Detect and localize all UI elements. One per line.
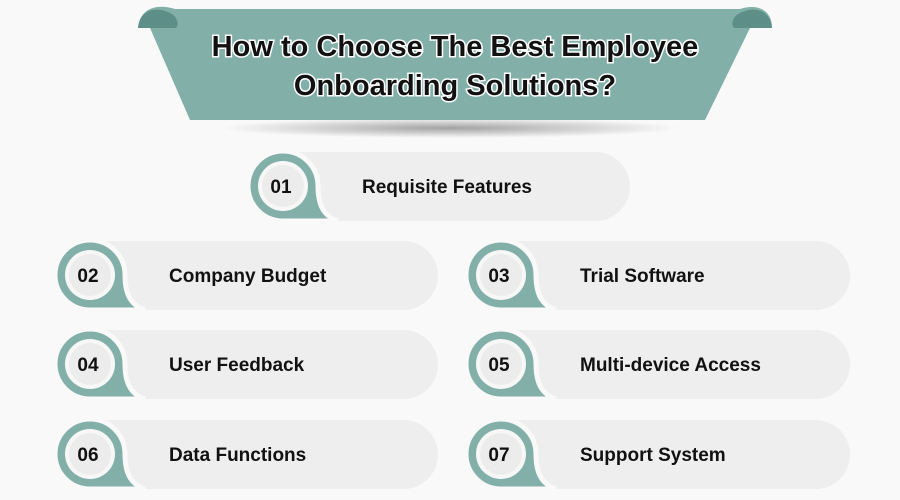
item 06 (55, 419, 438, 489)
item 07 (466, 419, 850, 489)
title banner: How to Choose The Best Employee (212, 31, 698, 63)
item 05 (466, 329, 850, 399)
item 02: Company Budget (169, 266, 327, 287)
item 01 (247, 151, 630, 221)
item 05: Multi-device Access (580, 355, 761, 376)
item 04: User Feedback (169, 355, 305, 376)
title banner (138, 7, 772, 138)
item 05: 05 (488, 355, 510, 376)
item 03: 03 (488, 266, 510, 287)
item 02 (55, 240, 438, 310)
item 03 (466, 240, 850, 310)
title banner: Onboarding Solutions? (294, 70, 616, 102)
item 01: Requisite Features (362, 177, 532, 198)
item 06: Data Functions (169, 445, 306, 466)
item 06: 06 (77, 445, 99, 466)
item 07: 07 (488, 445, 510, 466)
item 01: 01 (270, 177, 292, 198)
item 03: Trial Software (580, 266, 705, 287)
item 04: 04 (77, 355, 99, 376)
item 02: 02 (77, 266, 99, 287)
item 07: Support System (580, 445, 726, 466)
item 04 (55, 329, 438, 399)
